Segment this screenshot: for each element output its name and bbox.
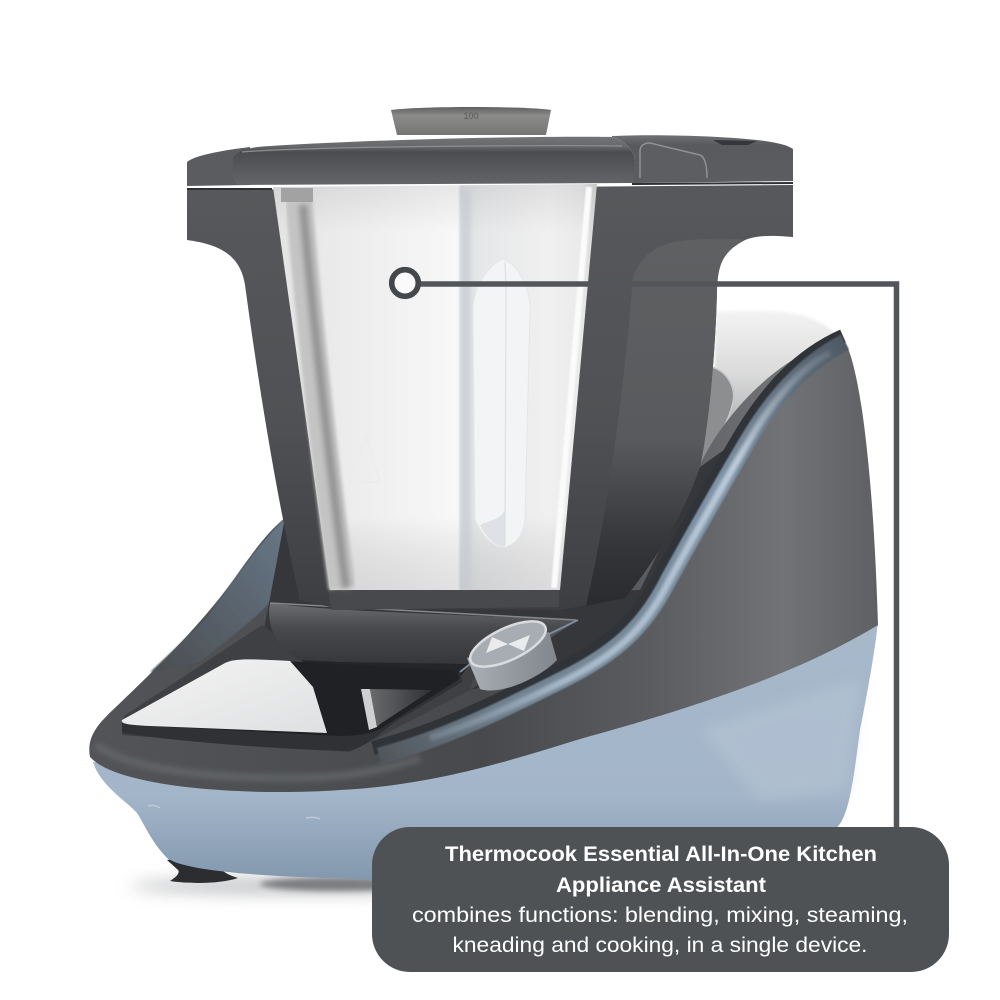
base: lower blue body <box>93 622 878 880</box>
callout description: kneading and cooking, in a single device. <box>452 933 868 957</box>
knob spokes <box>486 635 530 653</box>
callout panel <box>372 827 949 972</box>
base: inner cavity <box>262 435 745 690</box>
panel glass <box>122 660 459 736</box>
engraved scale <box>348 300 380 482</box>
callout description: combines functions: blending, mixing, steaming, <box>412 903 908 927</box>
panel shiny strip <box>361 689 377 730</box>
lid slot <box>713 140 757 145</box>
callout connector <box>392 270 896 830</box>
blade centre line <box>505 262 506 545</box>
base: dimple marks <box>148 805 320 819</box>
lid right section <box>612 135 793 183</box>
lid ridge <box>242 146 622 152</box>
base: lower blue glow <box>700 680 860 800</box>
floor shadow <box>130 878 470 894</box>
product: kitchen appliance <box>89 107 878 894</box>
callout title: Appliance Assistant <box>556 874 766 897</box>
base: rear blade <box>699 367 734 468</box>
lid main section <box>233 137 635 185</box>
band shadow <box>373 336 843 748</box>
bowl surface <box>273 184 597 590</box>
blade lower tip <box>480 510 505 546</box>
lid clasp <box>640 143 707 178</box>
left streak core <box>303 205 346 588</box>
base: upper deck <box>122 625 480 752</box>
panel edge <box>122 672 462 751</box>
tray under jug <box>269 603 576 680</box>
jug collar <box>328 587 559 610</box>
callout title: Thermocook Essential All-In-One Kitchen <box>445 843 877 866</box>
tray top edge <box>270 603 576 620</box>
step shadow <box>461 190 471 588</box>
lid back section <box>187 147 250 186</box>
connector ring <box>392 270 418 296</box>
lid gap shadow <box>187 183 793 189</box>
base: shell front highlight <box>96 745 420 778</box>
base: dark upper shell <box>89 340 878 792</box>
tray body <box>269 603 576 664</box>
panel glare <box>370 689 432 727</box>
right edge highlight <box>554 187 589 588</box>
callout background <box>372 827 949 972</box>
blade window <box>473 259 530 547</box>
steel bowl <box>273 184 597 590</box>
tray shadow <box>300 658 470 680</box>
top rim shadow <box>281 188 313 202</box>
contact shadow <box>260 877 420 891</box>
knob side <box>467 632 557 691</box>
base: slate left edge <box>150 518 285 672</box>
lid <box>187 107 793 186</box>
panel reflection <box>122 659 327 733</box>
display panel <box>122 659 462 751</box>
jug body dark <box>187 185 793 610</box>
control knob <box>460 612 578 691</box>
connector line <box>420 284 896 830</box>
base: steel-blue edge band <box>373 336 845 756</box>
bowl lower shading <box>273 184 597 590</box>
left streak wide <box>299 200 342 588</box>
cap label: 100 <box>463 111 479 121</box>
jug handle <box>586 239 745 606</box>
knob top <box>464 612 552 676</box>
band highlight <box>430 353 830 738</box>
band body <box>379 342 845 756</box>
foot <box>167 858 238 883</box>
base: rear shell highlight <box>712 311 842 470</box>
measuring cap <box>391 107 551 135</box>
knob collar <box>460 620 578 672</box>
